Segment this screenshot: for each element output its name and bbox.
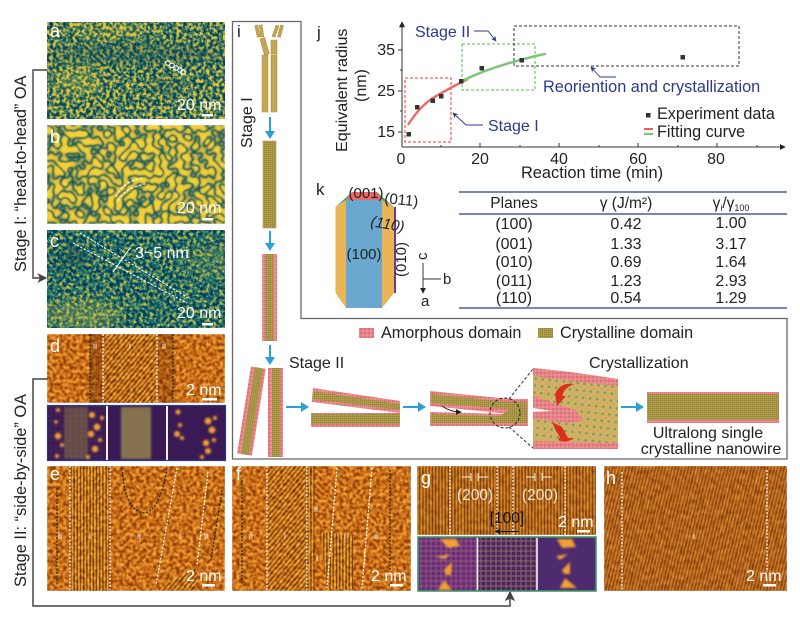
x tick labels — [397, 151, 725, 168]
panel c micrograph: 20 nm — [177, 305, 221, 322]
panel e micrograph: e — [50, 464, 60, 484]
table rows: 0.54 — [610, 290, 642, 307]
panel i: stage I assembly — [237, 22, 283, 457]
panel f micrograph: 2 nm — [371, 568, 407, 585]
panel c micrograph — [42, 230, 242, 331]
panel d micrograph: 2 nm — [186, 382, 222, 399]
panel d micrograph: i — [129, 341, 131, 351]
panel e micrograph: i — [89, 531, 91, 541]
panel k: crystal model: (010) — [393, 242, 410, 277]
y tick labels — [377, 42, 395, 141]
panel e micrograph: i — [179, 531, 181, 541]
panel f micrograph: i — [284, 531, 286, 541]
arrow: to final wire — [621, 402, 644, 412]
panel e micrograph: 2 nm — [186, 568, 222, 585]
label: Stage II side-by-side: Stage II: “side-by-side” OA — [12, 394, 30, 587]
table rows: (100) — [495, 216, 533, 233]
x axis title: Reaction time (min) — [521, 164, 663, 182]
y tick labels: 35 — [377, 42, 395, 59]
table header: 100 — [734, 203, 749, 213]
crystal axes — [414, 252, 451, 310]
bracket arrow: stage II — [33, 379, 510, 606]
legend: domains — [359, 324, 693, 342]
merging wires — [430, 369, 533, 448]
y tick labels: 25 — [377, 83, 395, 100]
table rows: 0.69 — [610, 254, 642, 271]
panel g micrograph: 2 nm — [558, 514, 594, 531]
panel h micrograph: h — [606, 468, 616, 488]
table rows: (010) — [495, 254, 533, 271]
panel d micrograph — [47, 334, 225, 403]
table rows: (110) — [496, 290, 532, 307]
panel g micrograph: (200) — [457, 487, 493, 504]
panel e micrograph: ii — [137, 531, 141, 541]
blue arrow 2 — [265, 231, 275, 251]
annotation: Reorientation: Reoriention and crystallization — [543, 78, 760, 96]
panel k: crystal model — [316, 180, 451, 310]
panel a micrograph — [47, 21, 227, 119]
annotation: Reorientation — [543, 67, 760, 96]
stage boxes — [405, 26, 739, 142]
table rows: 1.29 — [715, 290, 747, 307]
panel k: crystal model: (001) — [348, 185, 384, 202]
panel f micrograph — [232, 464, 411, 591]
panel d micrograph: d — [50, 336, 60, 356]
panel d inset — [48, 406, 226, 460]
panel g micrograph — [417, 466, 596, 535]
arrow: to stage II pair — [286, 402, 309, 412]
table rows: 1.64 — [715, 254, 747, 271]
bracket arrow: stage I — [33, 70, 46, 278]
y axis title — [333, 29, 370, 152]
panel a micrograph: a — [50, 21, 61, 41]
panel e micrograph: ii — [58, 531, 62, 541]
crystal axes: c — [414, 252, 431, 260]
table rows: 1.33 — [610, 236, 642, 253]
chart axes — [398, 22, 785, 147]
y axis title: Equivalent radius — [333, 29, 351, 152]
table rows: (001) — [495, 236, 533, 253]
table rows: 3.17 — [715, 236, 747, 253]
x tick labels: 80 — [707, 151, 725, 168]
table header: γ — [713, 195, 720, 212]
crystallization zoom — [533, 368, 618, 449]
surface energy table — [459, 192, 787, 308]
panel c micrograph: 3~5 nm — [135, 245, 189, 262]
x tick labels: 40 — [550, 151, 568, 168]
panel j: chart — [316, 22, 785, 182]
rod: amorphous shell — [262, 254, 277, 341]
blue arrow 1 — [265, 117, 275, 139]
panel c micrograph: c — [50, 231, 59, 251]
panel g inset — [418, 537, 596, 591]
table header: Planes — [490, 195, 538, 212]
panel b micrograph: b — [50, 127, 60, 147]
table rows: 1.23 — [610, 273, 642, 290]
table header: γ (J/m²) — [600, 195, 652, 212]
legend: domains: Crystalline domain — [560, 324, 693, 342]
label: Stage I head-to-head: Stage I: “head-to-head” OA — [12, 75, 30, 272]
label: Crystallization: Crystallization — [589, 355, 689, 372]
label: Stage II: Stage II — [289, 355, 344, 372]
panel d micrograph: ii — [162, 341, 166, 351]
y tick labels: 15 — [377, 124, 395, 141]
panel f micrograph: ii — [249, 531, 253, 541]
panel g micrograph: (200) — [522, 487, 558, 504]
table header — [490, 195, 749, 213]
label: Stage I vertical: Stage I — [239, 97, 256, 148]
panel h micrograph: 2 nm — [746, 568, 782, 585]
y axis title: (nm) — [353, 69, 370, 102]
table rows: 2.93 — [715, 273, 747, 290]
panel d micrograph: ii — [93, 341, 97, 351]
panel f micrograph: i — [316, 553, 318, 563]
chart legend: Fitting curve — [657, 123, 745, 141]
final nanowire — [647, 392, 779, 423]
tilted rod pair — [237, 366, 283, 457]
panel i: stage I assembly: i — [237, 22, 241, 41]
panel b micrograph — [47, 125, 225, 224]
panel j: chart: j — [316, 23, 321, 42]
caption: ultralong nanowire: crystalline nanowire — [641, 441, 781, 458]
panel f micrograph: i — [344, 531, 346, 541]
panel e micrograph: ii — [204, 531, 208, 541]
table rows — [495, 215, 747, 307]
table rows: (011) — [496, 273, 532, 290]
panel k: crystal model: (011) — [384, 190, 419, 211]
caption: ultralong nanowire — [641, 425, 781, 458]
panel a micrograph: 20 nm — [177, 97, 221, 114]
blue arrow 3 — [265, 345, 275, 365]
table rows: 1.00 — [715, 215, 747, 232]
panel g micrograph: [100] — [490, 510, 524, 527]
chart legend: Experiment data — [657, 105, 775, 123]
x tick labels: 20 — [471, 151, 489, 168]
caption: ultralong nanowire: Ultralong single — [653, 425, 763, 442]
rod: crystalline — [263, 141, 276, 228]
data points — [406, 55, 685, 136]
arrow: to merging pair — [403, 402, 426, 412]
crystal axes: b — [443, 271, 451, 288]
annotation: Stage I: Stage I — [488, 118, 539, 135]
panel g micrograph: g — [421, 468, 431, 488]
panel e micrograph — [47, 464, 225, 591]
wire pair attaching — [311, 388, 400, 427]
panel k: crystal model: (100) — [346, 246, 382, 263]
crystal axes: a — [421, 293, 430, 310]
fitting curves — [408, 54, 546, 125]
legend: domains: Amorphous domain — [381, 324, 521, 342]
panel f micrograph: f — [236, 464, 242, 484]
panel h micrograph: i — [693, 531, 695, 541]
table header: /γ — [722, 195, 735, 212]
table rows: 0.42 — [610, 216, 642, 233]
x tick labels: 60 — [629, 151, 647, 168]
panel k: crystal model: k — [316, 180, 325, 199]
chart legend — [644, 105, 775, 141]
panel h micrograph — [604, 466, 787, 591]
panel k: crystal model: (110) — [369, 213, 406, 236]
panel f micrograph: ii — [374, 531, 378, 541]
frame: schematic panels — [232, 22, 787, 459]
annotation: Stage I — [453, 113, 539, 135]
annotation: Stage II: Stage II — [415, 24, 470, 41]
x tick labels: 0 — [397, 151, 406, 168]
panel b micrograph: 20 nm — [177, 200, 221, 217]
panel f micrograph: ii — [314, 504, 318, 514]
annotation: Stage II — [415, 24, 496, 41]
table header: i — [720, 203, 722, 213]
